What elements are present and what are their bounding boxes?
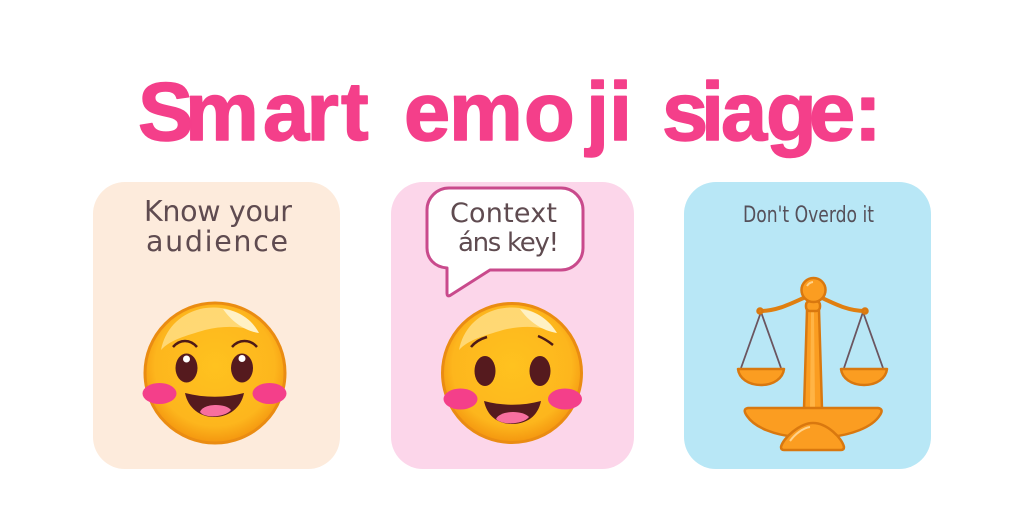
callout: speech bubble	[427, 188, 583, 296]
title: siage:	[662, 65, 882, 158]
panel: know your audience	[93, 182, 340, 469]
icon: smiling emoji with raised brows	[142, 303, 286, 443]
icon: smiling emoji with soft brows	[442, 304, 582, 442]
callout: speech bubble: Context	[450, 198, 557, 229]
panel: context is key	[391, 182, 634, 469]
panel: don't overdo it	[684, 182, 931, 469]
icon: balance scale	[738, 278, 887, 450]
heading: know your audience: audience	[146, 225, 288, 258]
heading: don't overdo it: Don't Overdo it	[743, 203, 874, 228]
title	[138, 65, 882, 158]
heading: know your audience: Know your	[144, 195, 292, 228]
heading: know your audience	[144, 195, 292, 258]
title: emoji	[404, 65, 632, 158]
callout: speech bubble: áns key!	[458, 228, 559, 258]
title: Smart	[138, 65, 369, 158]
